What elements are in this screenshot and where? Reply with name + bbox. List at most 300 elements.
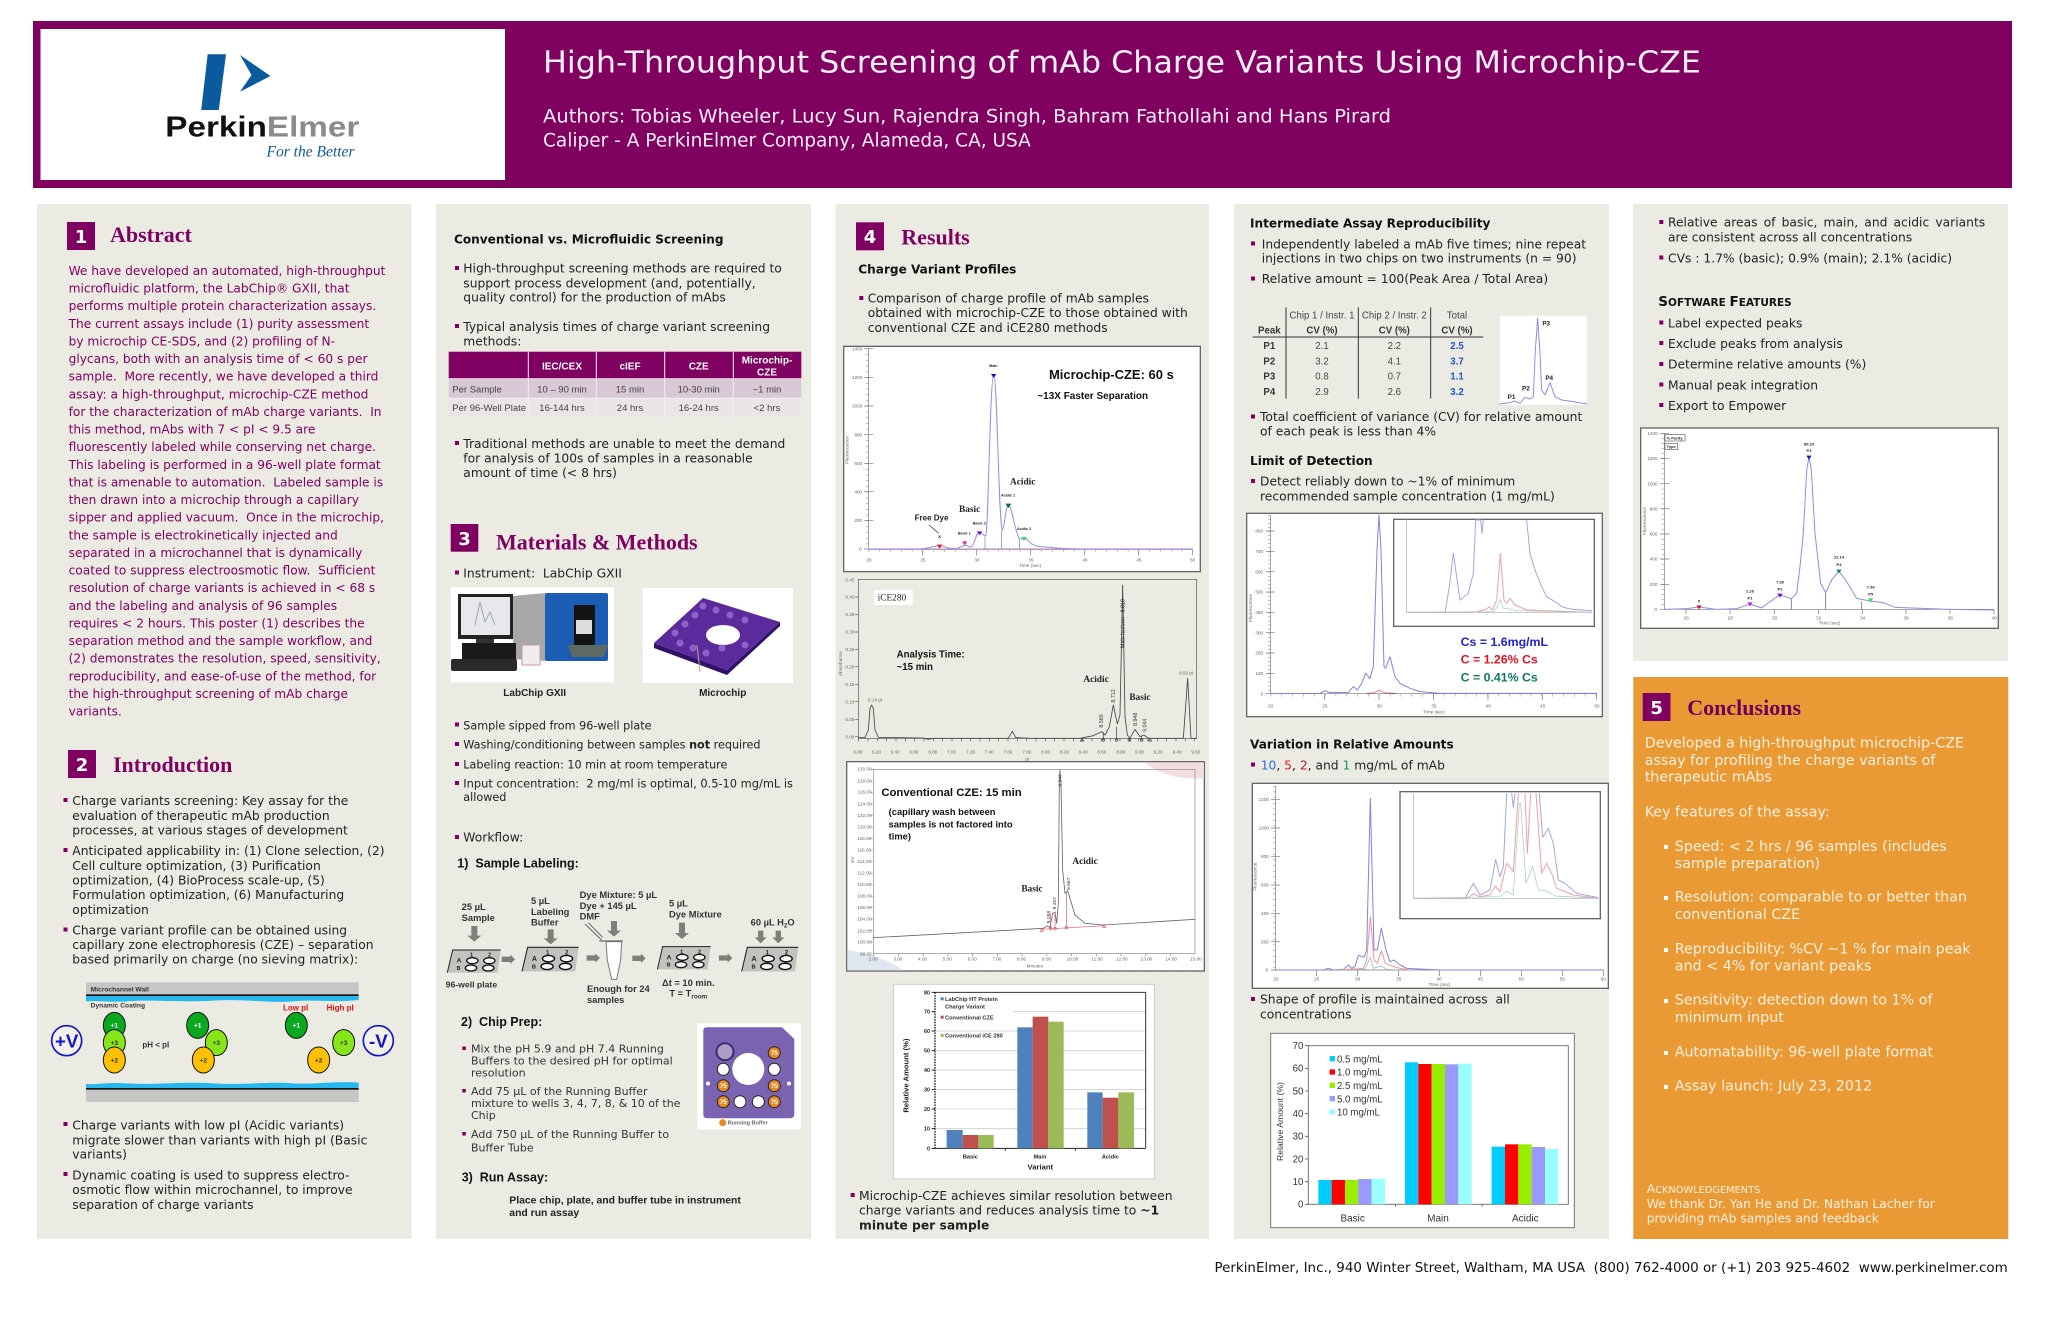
- panel: conventional vs microfluidic, materials and methods: [0, 0, 811, 1239]
- electropherogram: Conventional CZE 15 min: 10.00: [1067, 957, 1079, 962]
- bar chart: concentration series: 50: [1293, 1086, 1303, 1097]
- electropherogram: iCE280: 0.10: [845, 699, 855, 704]
- electropherogram: Conventional CZE 15 min: time): [889, 832, 911, 842]
- electropherogram: iCE280: 6.40: [891, 749, 900, 754]
- abstract text: sipper and applied vacuum. Once in the microchip,: [69, 511, 384, 525]
- limit of detection chart: 25: [1322, 703, 1328, 708]
- limit of detection chart: 30: [1377, 703, 1382, 708]
- plate 1: B: [457, 966, 461, 972]
- electropherogram: Conventional CZE 15 min: 126.00: [857, 790, 872, 795]
- chip layout diagram: 75: [771, 1084, 778, 1090]
- analysis time table: CZE: [757, 367, 777, 378]
- abstract text: by microchip CE-SDS, and (2) profiling of N-: [69, 334, 335, 348]
- electropherogram: Microchip-CZE 60 s: 0: [859, 547, 862, 552]
- plate 2: [522, 947, 579, 971]
- concentration overlay chart: 55: [1560, 977, 1565, 982]
- comparison bullet: Comparison of charge profile of mAb samples: [868, 292, 1149, 306]
- chip prep bullets: [0, 0, 684, 1154]
- bar chart: method comparison: Relative Amount (%): [902, 1038, 911, 1113]
- electropherogram: Conventional CZE 15 min: 124.00: [857, 801, 872, 806]
- concentration overlay chart: [1252, 783, 1608, 988]
- electropherogram: iCE280: 9.044: [1142, 719, 1148, 732]
- electropherogram: Microchip-CZE 60 s: Time (sec): [1019, 563, 1042, 568]
- image: LabChip GXII instrument: [451, 587, 614, 682]
- bar chart: method comparison: Variant: [1028, 1162, 1054, 1171]
- microchannel diagram: +1: [293, 1023, 300, 1030]
- concentration overlay chart: 45: [1478, 977, 1483, 982]
- limit of detection chart: 200: [1255, 651, 1264, 656]
- peak labelling chart: [1500, 316, 1587, 405]
- CV table: 2.2: [1388, 341, 1401, 352]
- screening bullets: quality control) for the production of mAbs: [463, 291, 726, 305]
- cathode -V: -V: [369, 1030, 388, 1051]
- analysis time table: 10-30 min: [678, 385, 720, 396]
- legend: 10 mg/mL: [1337, 1107, 1381, 1118]
- concentration overlay chart: 0: [1266, 968, 1269, 973]
- chip layout diagram: 75: [720, 1100, 727, 1106]
- detection bullet: [1251, 475, 1555, 503]
- peak labels: [958, 364, 1031, 535]
- electropherogram: iCE280: 0.20: [845, 664, 855, 669]
- electropherogram: Microchip-CZE 60 s: 40: [1082, 558, 1088, 563]
- software feature bullets: Label expected peaks: [1668, 316, 1802, 330]
- software chromatogram: P2: [1778, 586, 1783, 591]
- consistency bullets: Relative areas of basic, main, and acidic variants: [1668, 216, 1985, 230]
- electropherogram: Microchip-CZE 60 s: 35: [1028, 558, 1034, 563]
- electropherogram: iCE280: 0.45: [845, 578, 855, 583]
- chip layout diagram: Running Buffer: [728, 1121, 769, 1127]
- acknowledgements: A: [1647, 1181, 1656, 1196]
- concentration overlay chart: 1000: [1259, 826, 1269, 831]
- software chromatogram: 0: [1654, 607, 1657, 612]
- introduction bullets: Formulation optimization, (6) Manufacturing: [72, 888, 344, 902]
- electropherogram: Conventional CZE 15 min: Basic: [1021, 884, 1043, 894]
- CV table: 2.6: [1388, 387, 1401, 398]
- legend: [941, 997, 1003, 1040]
- sample labeling workflow: 2: [784, 922, 788, 929]
- electropherogram: Conventional CZE 15 min: 12.00: [1116, 957, 1128, 962]
- electropherogram: iCE280: 7.20: [966, 749, 975, 754]
- resolution bullet: [851, 1189, 1172, 1232]
- subheading: Charge Variant Profiles: Charge Variant Profiles: [858, 262, 1016, 276]
- sample labeling workflow: T = T: [669, 989, 691, 999]
- bar chart: concentration series: 20: [1293, 1154, 1303, 1165]
- limit of detection chart: 40: [1486, 703, 1491, 708]
- comparison bullet: obtained with microchip-CZE to those obtained with: [868, 306, 1188, 320]
- lower introduction bullets: Dynamic coating is used to suppress electro-: [72, 1168, 349, 1182]
- analysis time table: IEC/CEX: [542, 361, 582, 372]
- electropherogram: iCE280: 7.80: [1022, 749, 1032, 754]
- electropherogram: iCE280: 6.00: [853, 749, 863, 754]
- electropherogram: iCE280: 0.35: [845, 612, 855, 617]
- iCE280 label: [874, 590, 913, 605]
- sample labeling workflow: Δt = 10 min.: [662, 978, 715, 988]
- analysis time table: CZE: [689, 361, 709, 372]
- electropherogram: Conventional CZE 15 min: (capillary wash between: [889, 807, 996, 817]
- electropherogram: Conventional CZE 15 min: 15.00: [1190, 957, 1202, 962]
- CV table: 2.1: [1315, 341, 1329, 352]
- abstract text: fluorescently labeled while conserving net charge.: [69, 440, 376, 454]
- electropherogram: iCE280: 8.00: [1041, 749, 1050, 754]
- acknowledgements: CKNOWLEDGEMENTS: [1655, 1185, 1760, 1196]
- electropherogram: Microchip-CZE 60 s: 200: [854, 518, 863, 523]
- section number 2: 2: [76, 755, 88, 776]
- analysis time table: 10 – 90 min: [537, 385, 587, 396]
- software chromatogram: 1000: [1647, 481, 1658, 486]
- electropherogram: Conventional CZE 15 min: 116.00: [857, 847, 872, 852]
- software feature bullets: Manual peak integration: [1668, 378, 1818, 392]
- peak labels: Acidic 1: [1001, 494, 1015, 498]
- bar chart: concentration series: Acidic: [1512, 1214, 1539, 1225]
- section number 5: 5: [1650, 698, 1663, 719]
- CV table: P3: [1263, 372, 1276, 383]
- chip prep bullets: Buffers to the desired pH for optimal: [471, 1054, 673, 1067]
- introduction bullets: Anticipated applicability in: (1) Clone selection, (2): [72, 844, 385, 858]
- electropherogram: iCE280: 7.60: [1003, 749, 1013, 754]
- electropherogram: Microchip-CZE 60 s: Fluorescence: [845, 436, 850, 464]
- microchannel diagram: +3: [111, 1040, 118, 1047]
- profile bullet: [1251, 993, 1510, 1021]
- plate 4: B: [752, 965, 756, 971]
- plate 4: 2: [785, 950, 789, 956]
- screening bullets: Typical analysis times of charge variant screening: [462, 320, 770, 334]
- limit of detection chart: 20: [1268, 703, 1274, 708]
- CV conclusion bullet: Total coefficient of variance (CV) for relative amount: [1259, 410, 1582, 424]
- logo panel: PerkinElmer: [40, 29, 505, 180]
- sample labeling workflow: O: [787, 917, 795, 927]
- electropherogram: Conventional CZE 15 min: 98.00: [860, 951, 872, 956]
- CV table: P4: [1263, 387, 1276, 398]
- instrument bullets: Washing/conditioning between samples not required: [463, 739, 761, 752]
- software chromatogram: Time (sec): [1819, 621, 1841, 626]
- electropherogram: Conventional CZE 15 min: 118.00: [857, 836, 872, 841]
- electropherogram: iCE280: 7.40: [985, 749, 994, 754]
- abstract text: separation method and the sample workflow, and: [69, 634, 372, 648]
- CV table: 0.8: [1315, 372, 1329, 383]
- software feature bullets: [1659, 316, 1866, 413]
- concentrations bullet: 10, 5, 2, and 1 mg/mL of mAb: [1261, 758, 1445, 772]
- concentration overlay chart: 30: [1355, 977, 1361, 982]
- CV table: 2.9: [1315, 387, 1329, 398]
- software chromatogram: P1: [1748, 595, 1753, 600]
- electropherogram: iCE280: 9.40: [1173, 749, 1182, 754]
- variants group 3: [285, 1012, 355, 1073]
- CV table: 4.1: [1388, 356, 1401, 367]
- plate 3: A: [667, 954, 672, 961]
- anode +V: +V: [55, 1030, 79, 1051]
- limit of detection chart: 700: [1255, 549, 1264, 554]
- lower introduction bullets: osmotic flow within microchannel, to improve: [72, 1183, 353, 1197]
- detection bullet: recommended sample concentration (1 mg/mL): [1260, 489, 1555, 503]
- introduction bullets: Cell culture optimization, (3) Purification: [72, 859, 321, 873]
- concentration overlay chart: 25: [1314, 977, 1320, 982]
- electropherogram: Microchip-CZE 60 s: ×: [938, 535, 941, 541]
- lower introduction bullets: migrate slower than variants with high pI (Basic: [72, 1133, 367, 1147]
- electropherogram: iCE280: 6.20: [872, 749, 881, 754]
- arrows: [467, 921, 784, 964]
- legend: 2.5 mg/mL: [1337, 1081, 1383, 1092]
- panel: abstract and introduction: [0, 0, 412, 1239]
- electropherogram: Conventional CZE 15 min: 128.00: [857, 778, 872, 783]
- plate 1: 1: [470, 953, 473, 959]
- logo panel: PerkinElmer: Perkin Elmer: [165, 112, 359, 144]
- CV table: 2.5: [1450, 341, 1464, 352]
- introduction bullets: optimization, (4) BioProcess scale-up, (5): [72, 873, 325, 887]
- analysis time table: <2 hrs: [754, 403, 781, 414]
- bar chart: method comparison: 50: [924, 1049, 930, 1055]
- heading: Abstract: Abstract: [110, 222, 193, 247]
- electropherogram: Conventional CZE 15 min: Acidic: [1072, 857, 1098, 867]
- bar chart: method comparison: 0: [927, 1146, 930, 1152]
- key features list: [1664, 839, 1971, 1094]
- sample labeling workflow: Dye Mixture: [669, 909, 722, 919]
- peak labelling chart: P4: [1545, 375, 1554, 382]
- bar chart: concentration series: 0: [1298, 1200, 1303, 1211]
- conclusions intro: assay for profiling the charge variants of: [1645, 753, 1936, 769]
- software chromatogram: 7.36: [1776, 579, 1785, 584]
- electropherogram: Conventional CZE 15 min: 122.00: [857, 813, 872, 818]
- electropherogram: iCE280: Basic: [1129, 693, 1151, 703]
- section number 1: 1: [75, 227, 87, 248]
- limit of detection chart: 45: [1540, 703, 1546, 708]
- abstract text: the high-throughput screening of mAb charge: [69, 687, 348, 701]
- CV table: 3.7: [1450, 356, 1464, 367]
- sample labeling workflow: Dye Mixture: 5 µL: [580, 890, 657, 900]
- sample labeling workflow: Enough for 24: [587, 984, 651, 994]
- software feature bullets: Exclude peaks from analysis: [1668, 337, 1843, 351]
- sample labeling workflow: Dye + 145 µL: [580, 901, 637, 911]
- bar chart: concentration series: 30: [1293, 1132, 1303, 1143]
- electropherogram: iCE280: 8.60: [1097, 749, 1107, 754]
- panel: conclusions: [1633, 677, 2008, 1239]
- electropherogram: Conventional CZE 15 min: 5.00: [943, 957, 952, 962]
- image: microchip: [643, 588, 793, 683]
- electropherogram: iCE280: 6.60: [909, 749, 919, 754]
- software chromatogram: 22.14: [1834, 555, 1845, 560]
- limit of detection chart: 400: [1255, 610, 1264, 615]
- electropherogram: iCE280: Main Isoform - 8.810: [1120, 599, 1126, 648]
- reproducibility bullets: Independently labeled a mAb five times; nine repeat: [1262, 237, 1586, 251]
- software chromatogram: 800: [1650, 506, 1658, 511]
- sample labeling workflow: Buffer: [531, 918, 559, 928]
- electropherogram: Conventional CZE 15 min: samples is not factored into: [889, 819, 1013, 829]
- microchannel diagram: [52, 982, 393, 1102]
- electropherogram: Conventional CZE 15 min: 100.00: [857, 940, 872, 945]
- bar chart: concentration series: 60: [1293, 1064, 1303, 1075]
- panel: results: [835, 204, 1209, 1239]
- electropherogram: Conventional CZE 15 min: Conventional CZE: 15 min: [881, 787, 1022, 799]
- header banner: [33, 21, 2012, 188]
- electropherogram: Microchip-CZE 60 s: ~13X Faster Separation: [1037, 391, 1148, 402]
- electropherogram: Conventional CZE 15 min: 11.00: [1091, 957, 1103, 962]
- electropherogram: Conventional CZE 15 min: 108.00: [857, 894, 872, 899]
- software chromatogram: 40: [1992, 615, 1997, 620]
- peak labelling chart: P3: [1542, 321, 1551, 328]
- key features list: Resolution: comparable to or better than: [1675, 890, 1967, 906]
- legend: 5.0 mg/mL: [1337, 1094, 1383, 1105]
- analysis time table: Per Sample: [452, 385, 502, 396]
- limit of detection chart: 35: [1431, 703, 1437, 708]
- instrument bullets: allowed: [463, 791, 506, 804]
- electropherogram: iCE280: 0.30: [845, 630, 855, 635]
- concentration overlay chart: 35: [1396, 977, 1402, 982]
- software chromatogram: 34: [1860, 615, 1866, 620]
- peak markers: [1696, 456, 1873, 609]
- sample labeling workflow: 96-well plate: [446, 980, 497, 990]
- abstract text: This labeling is performed in a 96-well plate format: [68, 458, 381, 472]
- abstract text: then drawn into a microchip through a capillary: [69, 493, 359, 507]
- resolution bullet: Microchip-CZE achieves similar resolution between: [859, 1189, 1172, 1203]
- electropherogram: Conventional CZE 15 min: 120.00: [857, 824, 872, 829]
- software chromatogram: Fluorescence: [1642, 507, 1647, 535]
- section number 1: [67, 222, 95, 250]
- electropherogram: Microchip-CZE 60 s: Acidic: [1010, 478, 1035, 488]
- resolution bullet: minute per sample: [859, 1218, 989, 1232]
- analysis time table: 16-144 hrs: [539, 403, 585, 414]
- microtube: [585, 923, 623, 979]
- conclusions intro: Developed a high-throughput microchip-CZE: [1645, 736, 1964, 752]
- electropherogram: Conventional CZE 15 min: 4.00: [918, 957, 927, 962]
- anode +V: [52, 1026, 82, 1056]
- bar chart: method comparison: Main: [1034, 1154, 1047, 1160]
- section number 4: [856, 222, 884, 250]
- plate 1: [447, 950, 501, 973]
- electropherogram: Microchip-CZE 60 s: 50: [1190, 558, 1196, 563]
- microchannel diagram: +2: [315, 1057, 323, 1064]
- electropherogram: iCE280: 8.712: [1111, 689, 1117, 703]
- bar chart: method comparison: Acidic: [1102, 1154, 1119, 1160]
- analysis time table: 15 min: [616, 385, 644, 396]
- software chromatogram: 28: [1728, 615, 1733, 620]
- abstract text: glycans, both with an analysis time of < 60 s per: [69, 352, 368, 366]
- electropherogram: Microchip-CZE 60 s: 1200: [852, 375, 863, 380]
- legend: [1330, 1055, 1383, 1118]
- bar chart: method comparison: 10: [924, 1127, 930, 1133]
- heading: Conclusions: Conclusions: [1687, 695, 1801, 720]
- abstract text: and the labeling and analysis of 96 samples: [69, 599, 337, 613]
- limit of detection chart: 600: [1255, 569, 1264, 574]
- electropherogram: Conventional CZE 15 min: 9.867: [1066, 877, 1072, 890]
- CV conclusion bullet: [1251, 410, 1582, 439]
- electropherogram: Microchip-CZE 60 s: 600: [854, 461, 863, 466]
- electropherogram: Microchip-CZE 60 s: 1000: [852, 404, 863, 409]
- abstract text: requires < 2 hours. This poster (1) describes the: [69, 616, 365, 630]
- electropherogram: Conventional CZE 15 min: 110.00: [857, 882, 872, 887]
- concentration overlay chart: 20: [1273, 977, 1279, 982]
- key features list: Speed: < 2 hrs / 96 samples (includes: [1675, 839, 1947, 855]
- abstract text: microfluidic platform, the LabChip® GXII, that: [69, 282, 350, 296]
- chip prep bullets: resolution: [471, 1066, 526, 1079]
- electropherogram: Microchip-CZE 60 s: 20: [866, 558, 872, 563]
- plate 2: B: [532, 965, 536, 971]
- heading: Materials and Methods: Materials & Methods: [496, 529, 698, 554]
- screening bullets: methods:: [463, 335, 521, 349]
- electropherogram: iCE280: 0.05: [845, 717, 855, 722]
- electropherogram: iCE280: Acidic: [1083, 675, 1109, 685]
- software chromatogram: 600: [1650, 532, 1658, 537]
- step 1 heading: 1) Sample Labeling:: [457, 857, 579, 871]
- instrument bullets: Labeling reaction: 10 min at room temperature: [463, 759, 728, 772]
- reproducibility bullets: injections in two chips on two instruments (n = 90): [1262, 251, 1577, 265]
- abstract text: for the characterization of mAb charge variants. In: [69, 405, 382, 419]
- title: High-Throughput Screening of mAb Charge Variants Using Microchip-CZE: [543, 46, 1701, 81]
- CV table: Chip 1 / Instr. 1: [1290, 310, 1354, 321]
- sample labeling workflow: [446, 890, 798, 1005]
- CV table: CV (%): [1306, 326, 1338, 337]
- electropherogram: Conventional CZE 15 min: 13.00: [1141, 957, 1153, 962]
- instrument bullets: Sample sipped from 96-well plate: [463, 719, 652, 732]
- introduction bullets: [0, 0, 389, 967]
- chip layout diagram: 75: [771, 1100, 778, 1106]
- limit of detection chart: C = 1.26% Cs: [1461, 653, 1538, 667]
- bar chart: concentration series: 70: [1293, 1041, 1303, 1052]
- section number 5: [1643, 693, 1670, 721]
- peak labels: Main: [989, 364, 998, 368]
- lower introduction bullets: [0, 0, 371, 1212]
- bar chart: concentration series: Basic: [1340, 1214, 1365, 1225]
- electropherogram: Conventional CZE 15 min: 7.00: [992, 957, 1002, 962]
- limit of detection chart: Cs = 1.6mg/mL: [1461, 635, 1548, 649]
- electropherogram: Conventional CZE 15 min: Minutes: [1027, 964, 1044, 969]
- legend: Conventional iCE 280: [945, 1034, 1003, 1040]
- key features list: Reproducibility: %CV ~1 % for main peak: [1675, 942, 1971, 958]
- run assay text: and run assay: [509, 1208, 579, 1219]
- sample labeling workflow: 5 µL: [669, 899, 688, 909]
- electropherogram: Conventional CZE 15 min: 6.00: [968, 957, 977, 962]
- plate 4: [742, 947, 798, 971]
- bar chart: method comparison: 30: [924, 1088, 930, 1094]
- electropherogram: iCE280: 9.50 pI: [1179, 671, 1193, 676]
- workflow bullet: Workflow:: [463, 831, 523, 845]
- sample labeling workflow: 60 µL H: [751, 917, 784, 927]
- introduction bullets: capillary zone electrophoresis (CZE) – separation: [72, 938, 374, 952]
- CV table: [1253, 307, 1483, 399]
- concentration overlay chart: Fluorescence: [1253, 862, 1258, 891]
- sample labeling workflow: room: [691, 994, 708, 1001]
- electropherogram: Microchip-CZE 60 s: Microchip-CZE: 60 s: [1049, 367, 1174, 382]
- analysis time table: 16-24 hrs: [679, 403, 719, 414]
- microchannel diagram: +2: [200, 1057, 207, 1064]
- sample labeling workflow: 25 µL: [462, 902, 486, 912]
- chart options: Type: [1667, 444, 1676, 449]
- plate 4: 1: [766, 950, 770, 956]
- microchannel diagram: Dynamic Coating: [91, 1003, 145, 1010]
- lower introduction bullets: Charge variants with low pI (Acidic variants): [72, 1118, 344, 1132]
- electropherogram: Conventional CZE 15 min: 106.00: [857, 905, 872, 910]
- limit of detection chart: 300: [1255, 630, 1264, 635]
- caption: Microchip: Microchip: [699, 688, 746, 699]
- iCE280 label: iCE280: [878, 594, 907, 604]
- electropherogram: Conventional CZE 15 min: 104.00: [857, 917, 872, 922]
- electropherogram: iCE280: ~15 min: [897, 662, 933, 673]
- concentration overlay chart: 200: [1261, 939, 1269, 944]
- limit of detection chart: C = 0.41% Cs: [1461, 671, 1538, 685]
- bar chart: method comparison: 60: [924, 1029, 930, 1035]
- concentration overlay chart: 1200: [1259, 797, 1269, 802]
- peak labels: Acidic 2: [1017, 527, 1031, 531]
- profile bullet: concentrations: [1260, 1007, 1352, 1021]
- software chromatogram: 36: [1904, 615, 1909, 620]
- concentration overlay chart: 800: [1261, 854, 1269, 859]
- software chromatogram: 2.28: [1746, 588, 1755, 593]
- section number 4: 4: [864, 227, 876, 248]
- key features list: sample preparation): [1675, 856, 1820, 872]
- electropherogram: iCE280: 8.14 pI: [868, 697, 882, 702]
- chip prep bullets: Mix the pH 5.9 and pH 7.4 Running: [471, 1042, 664, 1055]
- legend: 1.0 mg/mL: [1337, 1068, 1383, 1079]
- logo panel: PerkinElmer: For the Better: [266, 144, 355, 161]
- microchannel diagram: +3: [340, 1040, 348, 1047]
